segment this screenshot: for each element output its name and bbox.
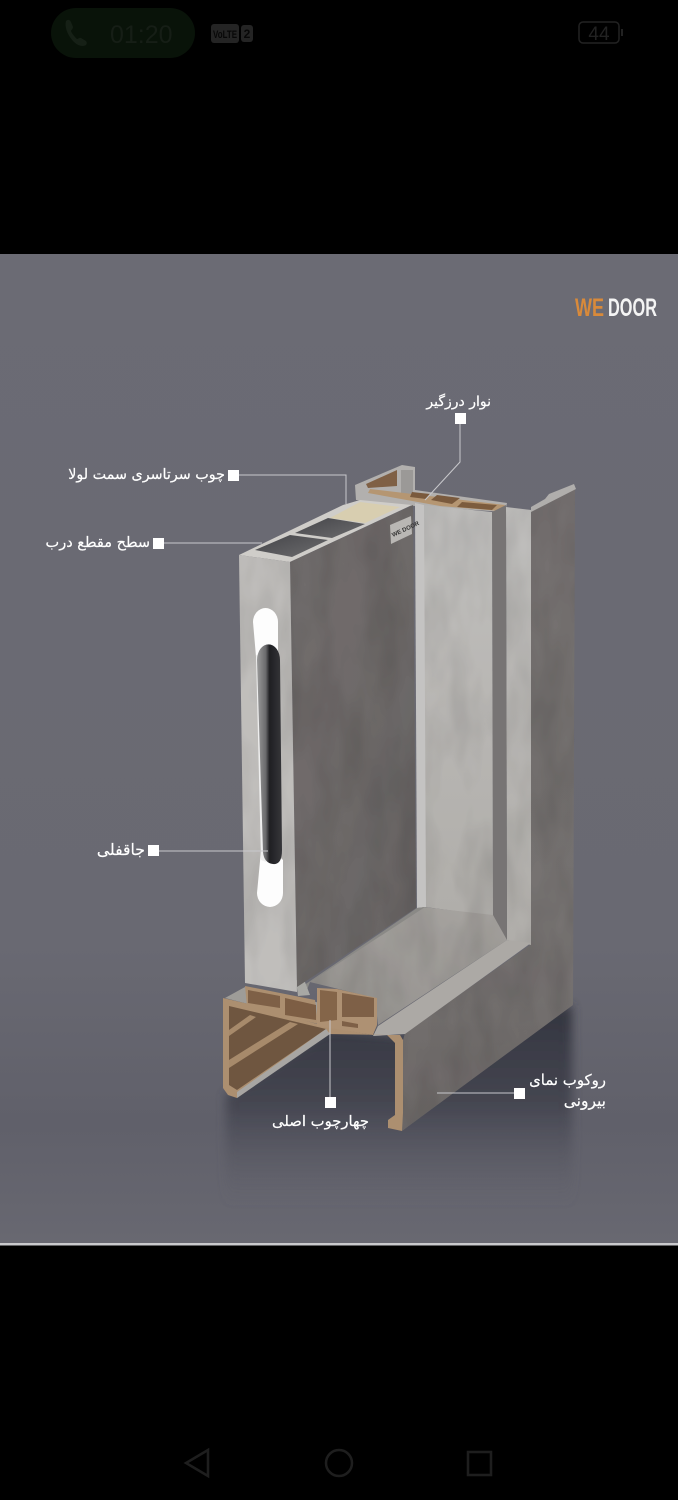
casing light jamb (506, 507, 531, 945)
logo (575, 294, 657, 322)
left light top (225, 987, 330, 1025)
callout: door cross section: سطح مقطع درب (46, 535, 150, 551)
callout: exterior casing: روکوب نمای (529, 1071, 606, 1089)
door stop block (245, 986, 318, 1024)
call pill: 01:20 (110, 21, 173, 49)
call pill (51, 8, 195, 58)
casing shadow strip (492, 505, 507, 940)
door leaf (239, 500, 421, 992)
callout: hinge side full-length wood (68, 467, 346, 504)
main frame block (317, 988, 377, 1035)
callout: door cross section (46, 535, 262, 551)
casing band (373, 940, 531, 1036)
lock cutout (253, 608, 283, 907)
network badge: 2 (244, 27, 251, 41)
callout: exterior casing: بیرونی (564, 1092, 606, 1111)
gasket (296, 980, 310, 996)
door top (239, 500, 412, 562)
callout: weatherstrip (425, 393, 491, 500)
navigation bar (186, 1450, 491, 1476)
callout: main frame (272, 1020, 369, 1130)
callout: lock recess (97, 840, 268, 859)
callout: hinge side full-length wood: چوب سرتاسری سمت لولا (68, 467, 225, 483)
status bar (51, 8, 623, 58)
callout: exterior casing (437, 1071, 606, 1111)
battery: 44 (588, 24, 610, 45)
callout: weatherstrip: نوار درزگیر (425, 393, 491, 410)
network badge: VoLTE (213, 29, 237, 41)
casing top lip (531, 484, 576, 512)
stop strip (415, 503, 426, 908)
background panel (0, 254, 678, 1246)
battery (579, 22, 623, 45)
left lower wall (237, 1029, 330, 1098)
sill stop (297, 907, 425, 995)
floor reflection (226, 1005, 572, 1205)
outer casing side (402, 487, 575, 1131)
door frame (223, 465, 576, 1131)
network badge (211, 24, 253, 43)
door face (290, 505, 416, 987)
door edge (239, 555, 297, 992)
door label: WE DOOR (391, 521, 421, 539)
callout: main frame: چهارچوب اصلی (272, 1113, 369, 1130)
inner jamb (423, 505, 493, 916)
callout: lock recess: جاقفلی (97, 840, 145, 859)
frame top section (355, 465, 507, 512)
bottom cross section (223, 980, 403, 1131)
sill top (310, 907, 507, 1025)
left cavity (229, 1006, 326, 1090)
casing profile (223, 998, 403, 1131)
logo: WE (575, 294, 604, 322)
door label (390, 516, 421, 544)
